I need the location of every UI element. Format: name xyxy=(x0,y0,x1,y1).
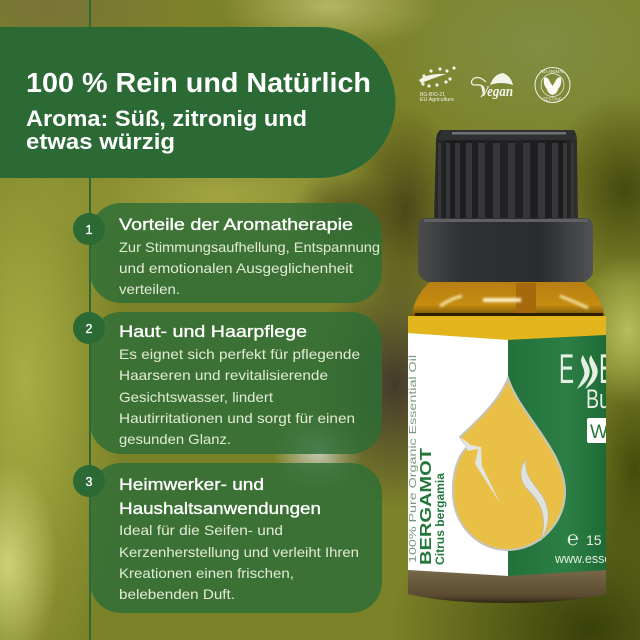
white label xyxy=(408,333,509,576)
icon: EU organic leaf xyxy=(419,66,456,103)
panel 2 body: Haarseren und revitalisierende xyxy=(119,367,328,383)
bottle cap xyxy=(418,130,593,282)
panel 3: Heimwerker xyxy=(73,463,382,613)
label brand text: www.essen xyxy=(554,552,618,566)
panel 3 heading xyxy=(119,475,321,518)
label brand text: Bu xyxy=(586,384,610,414)
panel 1 body: Zur Stimmungsaufhellung, Entspannung xyxy=(119,239,380,255)
bottle xyxy=(407,130,618,603)
amber glass shoulder xyxy=(408,282,606,320)
panel 1: Aromatherapie xyxy=(73,203,382,303)
label text: BERGAMOT: BERGAMOT xyxy=(418,448,435,565)
title: 100 % Rein und Natürlich xyxy=(26,67,371,98)
panel 3 body xyxy=(119,522,359,602)
subtitle line 1: Aroma: Süß, zitronig und xyxy=(26,106,307,131)
badge 3 xyxy=(73,465,105,497)
icon: EU organic leaf: BG-BIO-21 xyxy=(420,92,445,98)
panel 2 body: Hautirritationen und sorgt für einen xyxy=(119,410,355,426)
icon: no animal testing: TESTING xyxy=(543,96,563,102)
label drop xyxy=(453,378,565,550)
timeline line xyxy=(89,0,91,640)
bottle yellow band xyxy=(408,316,606,340)
icon: vegan xyxy=(471,73,513,100)
badge 1: 1 xyxy=(86,223,93,237)
icon: EU organic leaf: EU Agriculture xyxy=(420,97,454,103)
label brand text xyxy=(555,354,606,563)
badge 1 xyxy=(73,213,105,245)
label text: Citrus bergamia: Citrus bergamia xyxy=(435,472,447,565)
panel 2 body xyxy=(119,346,360,447)
panel 3 body: Ideal für die Seifen- und xyxy=(119,522,283,538)
bottle bottom xyxy=(408,568,606,603)
icon: vegan: Vegan xyxy=(480,84,513,100)
badge 2 xyxy=(73,312,105,344)
label brand text: 15 m xyxy=(586,532,617,548)
green label xyxy=(508,335,606,576)
panel 2: Haut- und Haarpflege xyxy=(73,312,382,454)
panel 3 heading: Haushaltsanwendungen xyxy=(119,499,321,518)
panel 1 heading: Vorteile der Aromatherapie xyxy=(119,215,353,234)
badge 3: 3 xyxy=(86,475,93,489)
panel 3 body: belebenden Duft. xyxy=(119,586,235,602)
label brand text: E xyxy=(559,345,574,392)
panel 1 body: verteilen. xyxy=(119,281,180,297)
label brand text: E xyxy=(599,345,614,392)
panel 2 body: Es eignet sich perfekt für pflegende xyxy=(119,346,360,362)
panel 3 body: Kerzenherstellung und verleiht Ihren xyxy=(119,544,359,560)
icon: no animal testing: NO ANIMAL xyxy=(540,69,565,74)
panel 2 body: Gesichtswasser, lindert xyxy=(119,389,273,405)
panel 3 body: Kreationen einen frischen, xyxy=(119,565,294,581)
label text: 100% pure: 100% Pure Organic Essential Oil xyxy=(407,355,419,563)
panel 3 heading: Heimwerker- und xyxy=(119,475,264,494)
subtitle line 2: etwas würzig xyxy=(26,129,175,154)
badge 2: 2 xyxy=(86,322,93,336)
label brand text: Wo xyxy=(590,422,618,443)
panel: header xyxy=(0,27,396,178)
label brand text: ℮ xyxy=(567,528,579,550)
panel 2 body: gesunden Glanz. xyxy=(119,431,231,447)
icon: no animal testing xyxy=(535,68,570,102)
panel 2 heading: Haut- und Haarpflege xyxy=(119,322,307,341)
panel 1 body xyxy=(119,239,380,297)
panel 1 body: und emotionalen Ausgeglichenheit xyxy=(119,260,353,276)
